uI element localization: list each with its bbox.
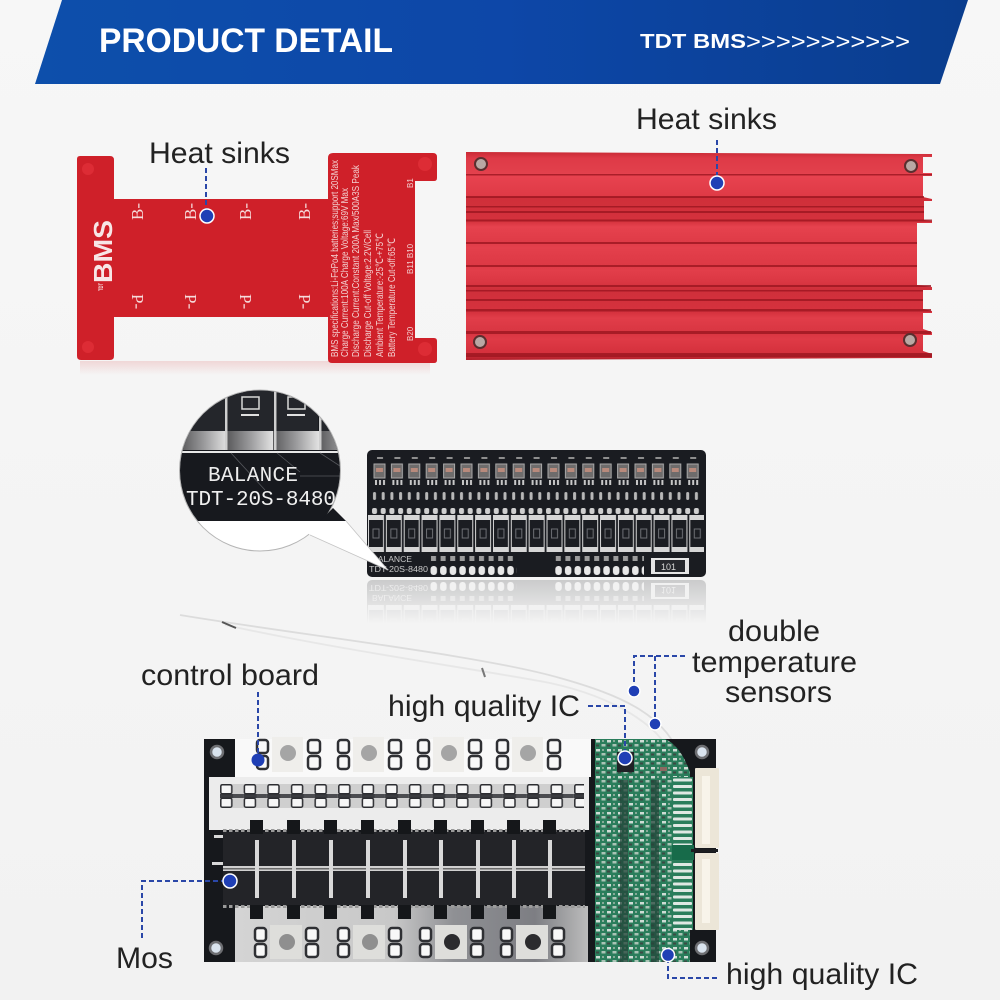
label: high quality IC bottom: high quality IC [726,958,918,991]
specification text: Discharge Current:Constant 200A Max/500A3S Peak [351,164,362,357]
balance board resistor 101 [651,558,689,574]
terminal pads top [257,740,560,769]
magnified resistors [178,388,343,490]
callout: Mos dashed line and dot [142,874,237,938]
silver bottom strip [235,906,588,962]
MOS vertical links [250,820,556,919]
callout: left heat sink dashed line and dot [200,168,214,223]
label: heat sinks right: Heat sinks [636,103,777,136]
white connector [691,768,719,930]
header banner [35,0,968,84]
PCB labels P-: P- [128,294,147,309]
specification text: B11 B10 [406,243,415,274]
balance board text: BALANCE [372,555,412,564]
magnifier callout [178,388,388,570]
specification text: BMS specifications:Li-FePo4 batteries;support 20SMax [330,160,341,357]
balancing resistor rows [220,784,584,808]
panel: red heat sink [466,152,932,360]
heat sink fin lines [466,174,932,357]
PCB labels P-: P- [295,294,314,309]
heat sink screws [474,158,917,348]
magnified text: BALANCE [208,465,298,488]
PCB labels B-: B- [295,203,314,220]
panel: red PCB cover [77,153,437,375]
silver top strip [235,739,591,777]
heading: chevrons: >>>>>>>>>>> [746,29,910,54]
lower terminals [270,925,548,959]
PCB labels B-: B- [181,203,200,220]
panel: balance board [367,450,706,577]
BMS logo: BMS [88,220,118,283]
specification text: B20 [406,326,415,341]
label: double temperature sensors: temperature [692,646,857,679]
specification text: Charge Current:100A Charge Voltage:69V Max [340,188,351,357]
label: heat sinks left: Heat sinks [149,137,290,170]
BMS logo: TDT [99,283,105,291]
label: double temperature sensors: sensors [725,676,832,709]
callout: control board dashed line and dot [252,692,264,766]
specification text: Discharge Cut-off Voltage:2.2V/Cell [363,230,374,357]
specification text: B1 [406,178,415,188]
callout: top IC dashed line and dot [588,706,632,765]
balance board reflection [367,580,706,616]
PCB labels B-: B- [128,203,147,220]
magnifier callout: TDT-20S-8480 [186,489,336,512]
PCB labels P-: P- [236,294,255,309]
upper terminals [272,737,543,772]
silver middle strip [209,777,589,830]
callout: right heat sink dashed line and dot [710,140,724,190]
balance board text: TDT-20S-8480 [369,565,429,574]
panel: main BMS board [204,737,719,962]
balance board text [369,555,429,574]
PCB labels P-: P- [181,294,200,309]
heading: product detail: PRODUCT DETAIL [99,22,393,60]
callout: temperature sensor dashed lines and dots [628,656,685,730]
label: Mos: Mos [116,942,173,975]
specification text: Battery Temperature Cut-off:65℃ [387,238,398,357]
PCB labels B- [128,203,314,220]
green PCB section [595,739,694,962]
terminal pads bottom [255,928,564,957]
label: double temperature sensors: double [728,615,820,648]
label: control board: control board [141,659,319,692]
label: high quality IC top: high quality IC [388,690,580,723]
PCB labels B-: B- [236,203,255,220]
heading: TDT BMS: TDT BMS [640,31,746,53]
specification text [330,160,415,357]
temperature sensor wires [180,615,683,765]
MOS chips band [223,829,585,908]
callout: bottom IC dashed line and dot [662,948,718,978]
balance board resistor 101: 101 [661,562,676,572]
label: double temperature sensors [692,615,857,709]
PCB labels P- [128,294,314,309]
specification text: Ambient Temperature:-25℃-+75℃ [375,233,386,357]
left edge contacts [212,835,223,865]
mounting holes [210,746,708,954]
